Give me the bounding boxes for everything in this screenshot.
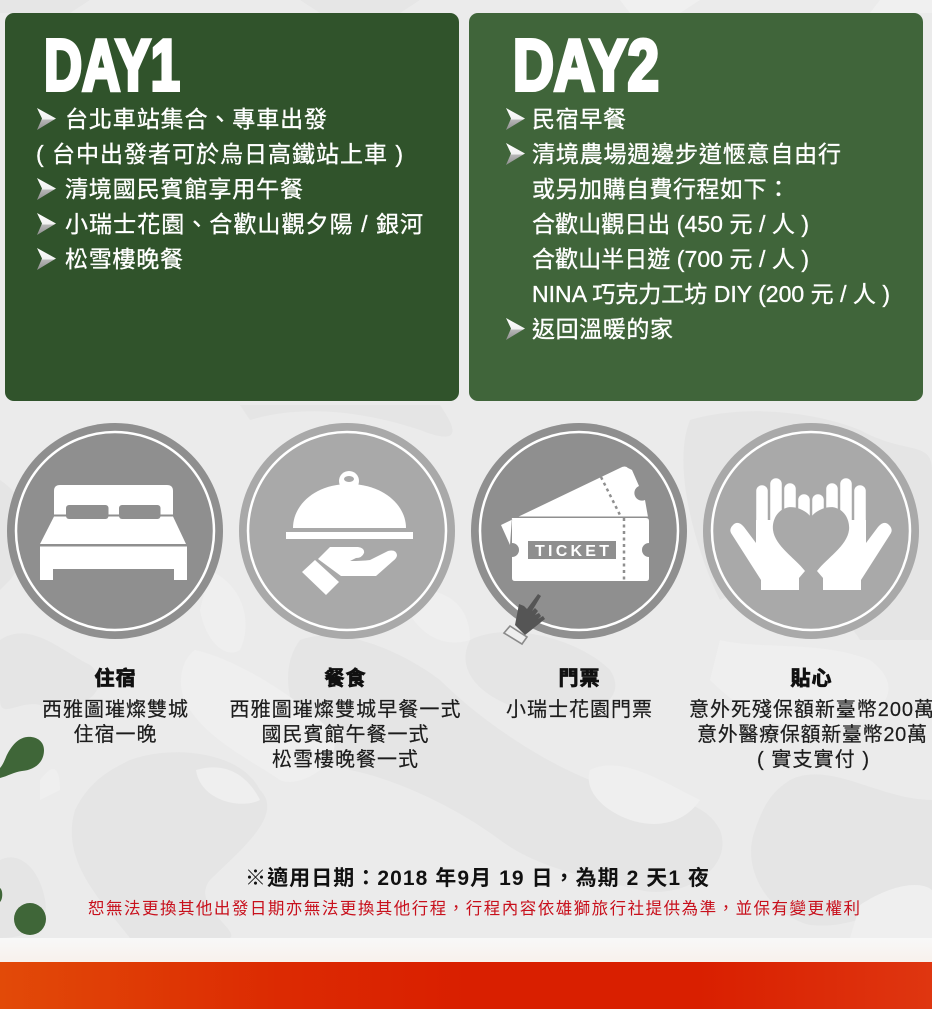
item: care insurance (689, 667, 932, 771)
day 2 itinerary list: 或另加購自費行程如下： (532, 176, 790, 202)
item: care insurance: ( 實支實付 ) (757, 748, 869, 771)
item: accommodation: 西雅圖璀燦雙城 (42, 698, 188, 721)
item: accommodation (42, 666, 188, 746)
panel: day 2 (469, 13, 923, 401)
day 1 itinerary list: 台北車站集合、專車出發 (65, 106, 327, 132)
day 1 itinerary list (36, 106, 423, 272)
day 2 itinerary list: 民宿早餐 (532, 106, 626, 132)
item: meals: 餐食 (324, 666, 366, 690)
item: accommodation: 住宿一晚 (74, 723, 156, 746)
item: meals: 國民賓館午餐一式 (262, 723, 428, 746)
heading: DAY2: DAY2 (513, 26, 659, 106)
day 2 itinerary list (506, 106, 890, 342)
icon: pointing hand cursor (504, 594, 545, 644)
day 1 itinerary list: 松雪樓晚餐 (65, 246, 183, 272)
day 2 itinerary list: 清境農場週邊步道愜意自由行 (532, 141, 841, 167)
item: care insurance: 意外死殘保額新臺幣200萬 (689, 698, 932, 721)
panel: day 1 (5, 13, 459, 401)
heading: DAY1: DAY1 (44, 26, 180, 106)
green paint splatter (0, 737, 46, 935)
day 2 itinerary list: 合歡山半日遊 (700 元 / 人 ) (532, 246, 809, 272)
item: tickets: 門票 (558, 668, 600, 690)
icon: ticket: TICKET (535, 543, 609, 560)
footer strip (0, 938, 932, 962)
item: meals: 西雅圖璀燦雙城早餐一式 (230, 698, 460, 721)
icon: serving cloche (239, 423, 455, 639)
day 2 itinerary list: 返回溫暖的家 (532, 316, 673, 342)
red footer band (0, 962, 932, 1009)
item: care insurance: 貼心 (790, 667, 832, 690)
applicable dates: ※適用日期：2018 年9月 19 日，為期 2 天1 夜 (245, 866, 709, 890)
item: care insurance: 意外醫療保額新臺幣20萬 (697, 723, 927, 746)
disclaimer: 恕無法更換其他出發日期亦無法更換其他行程，行程內容依雄獅旅行社提供為準，並保有變更權利 (88, 899, 860, 918)
icon: bed (7, 423, 223, 639)
item: meals (230, 666, 460, 771)
day 1 itinerary list: 小瑞士花園、合歡山觀夕陽 / 銀河 (65, 211, 423, 237)
icon: hands holding heart (703, 423, 919, 639)
day 1 itinerary list: 清境國民賓館享用午餐 (65, 176, 303, 202)
day 2 itinerary list: NINA 巧克力工坊 DIY (200 元 / 人 ) (532, 281, 890, 307)
item: meals: 松雪樓晚餐一式 (272, 748, 418, 771)
icon: ticket (471, 423, 687, 639)
item: tickets: 小瑞士花園門票 (506, 698, 652, 721)
day 2 itinerary list: 合歡山觀日出 (450 元 / 人 ) (532, 211, 809, 237)
item: tickets (506, 668, 652, 721)
day 1 itinerary list: ( 台中出發者可於烏日高鐵站上車 ) (36, 141, 403, 167)
item: accommodation: 住宿 (94, 666, 136, 690)
